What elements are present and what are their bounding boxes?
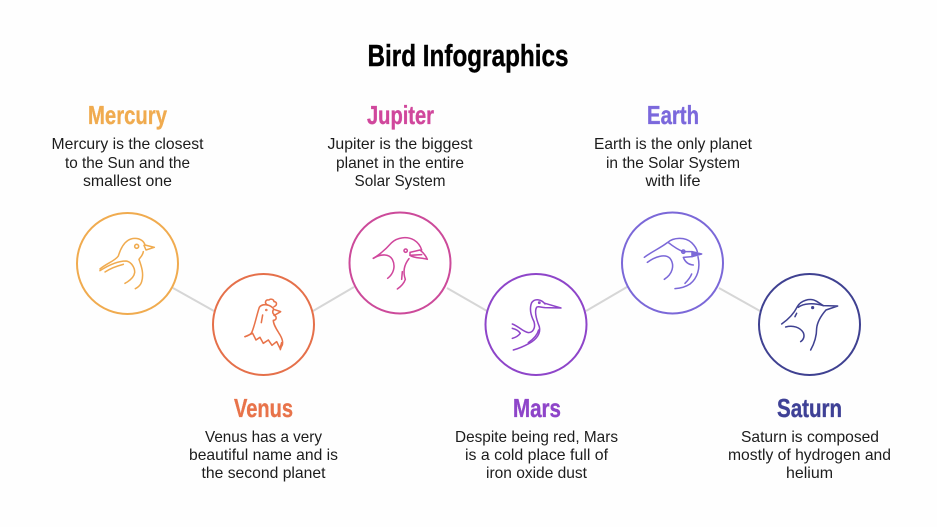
icon: heron bbox=[512, 300, 561, 350]
heading: Jupiter: Jupiter bbox=[367, 100, 434, 130]
circle: Earth bbox=[622, 212, 723, 314]
text block: Jupiter: Jupiter is the biggest bbox=[328, 136, 473, 153]
heading: Venus: Venus bbox=[234, 393, 293, 423]
panel: Venus bbox=[189, 274, 338, 482]
panel: Earth bbox=[594, 100, 753, 314]
text block: Saturn: helium bbox=[786, 465, 833, 482]
text block: Mercury: to the Sun and the bbox=[65, 155, 190, 172]
text block: Saturn: Saturn is composed bbox=[741, 429, 879, 446]
text block: Jupiter: Solar System bbox=[354, 173, 446, 190]
text block: Venus: beautiful name and is bbox=[189, 447, 338, 464]
text block: Earth bbox=[594, 136, 753, 190]
circle: Saturn bbox=[759, 274, 860, 375]
heading: Saturn: Saturn bbox=[777, 393, 842, 423]
text block: Saturn bbox=[728, 429, 891, 482]
circle: Venus bbox=[213, 274, 314, 375]
text block: Earth: with life bbox=[644, 173, 700, 190]
text block: Venus: Venus has a very bbox=[205, 429, 322, 446]
panel: Mars bbox=[455, 274, 618, 482]
circle: Jupiter bbox=[350, 212, 450, 314]
panel: Mercury bbox=[52, 100, 204, 314]
heading: Mars: Mars bbox=[513, 393, 561, 423]
icon: songbird bbox=[100, 238, 154, 289]
text block: Mercury bbox=[52, 136, 204, 190]
text block: Mercury: smallest one bbox=[83, 173, 172, 190]
heading: Mercury: Mercury bbox=[88, 100, 167, 130]
text block: Mars: is a cold place full of bbox=[465, 447, 609, 464]
text block: Mars: Despite being red, Mars bbox=[455, 429, 618, 446]
text block: Jupiter: planet in the entire bbox=[336, 155, 464, 172]
icon: sparrow bbox=[782, 300, 838, 350]
text block: Venus: the second planet bbox=[202, 465, 326, 482]
panel: Jupiter bbox=[328, 100, 473, 314]
text block: Earth: in the Solar System bbox=[606, 155, 740, 172]
text block: Mars bbox=[455, 429, 618, 482]
panel: Saturn bbox=[728, 274, 891, 482]
icon: finch bbox=[373, 238, 427, 289]
text block: Venus bbox=[189, 429, 338, 482]
connector lines bbox=[173, 287, 760, 311]
icon: hen bbox=[245, 299, 283, 350]
text block: Mars: iron oxide dust bbox=[486, 465, 588, 482]
circle: Mars bbox=[486, 274, 586, 375]
text block: Mercury: Mercury is the closest bbox=[52, 136, 204, 153]
icon: swallow bbox=[644, 238, 702, 289]
text block: Earth: Earth is the only planet bbox=[594, 136, 753, 153]
circle: Mercury bbox=[77, 213, 178, 314]
text block: Saturn: mostly of hydrogen and bbox=[728, 447, 891, 464]
title: Bird Infographics bbox=[368, 38, 568, 73]
heading: Earth: Earth bbox=[647, 100, 699, 130]
text block: Jupiter bbox=[328, 136, 473, 190]
